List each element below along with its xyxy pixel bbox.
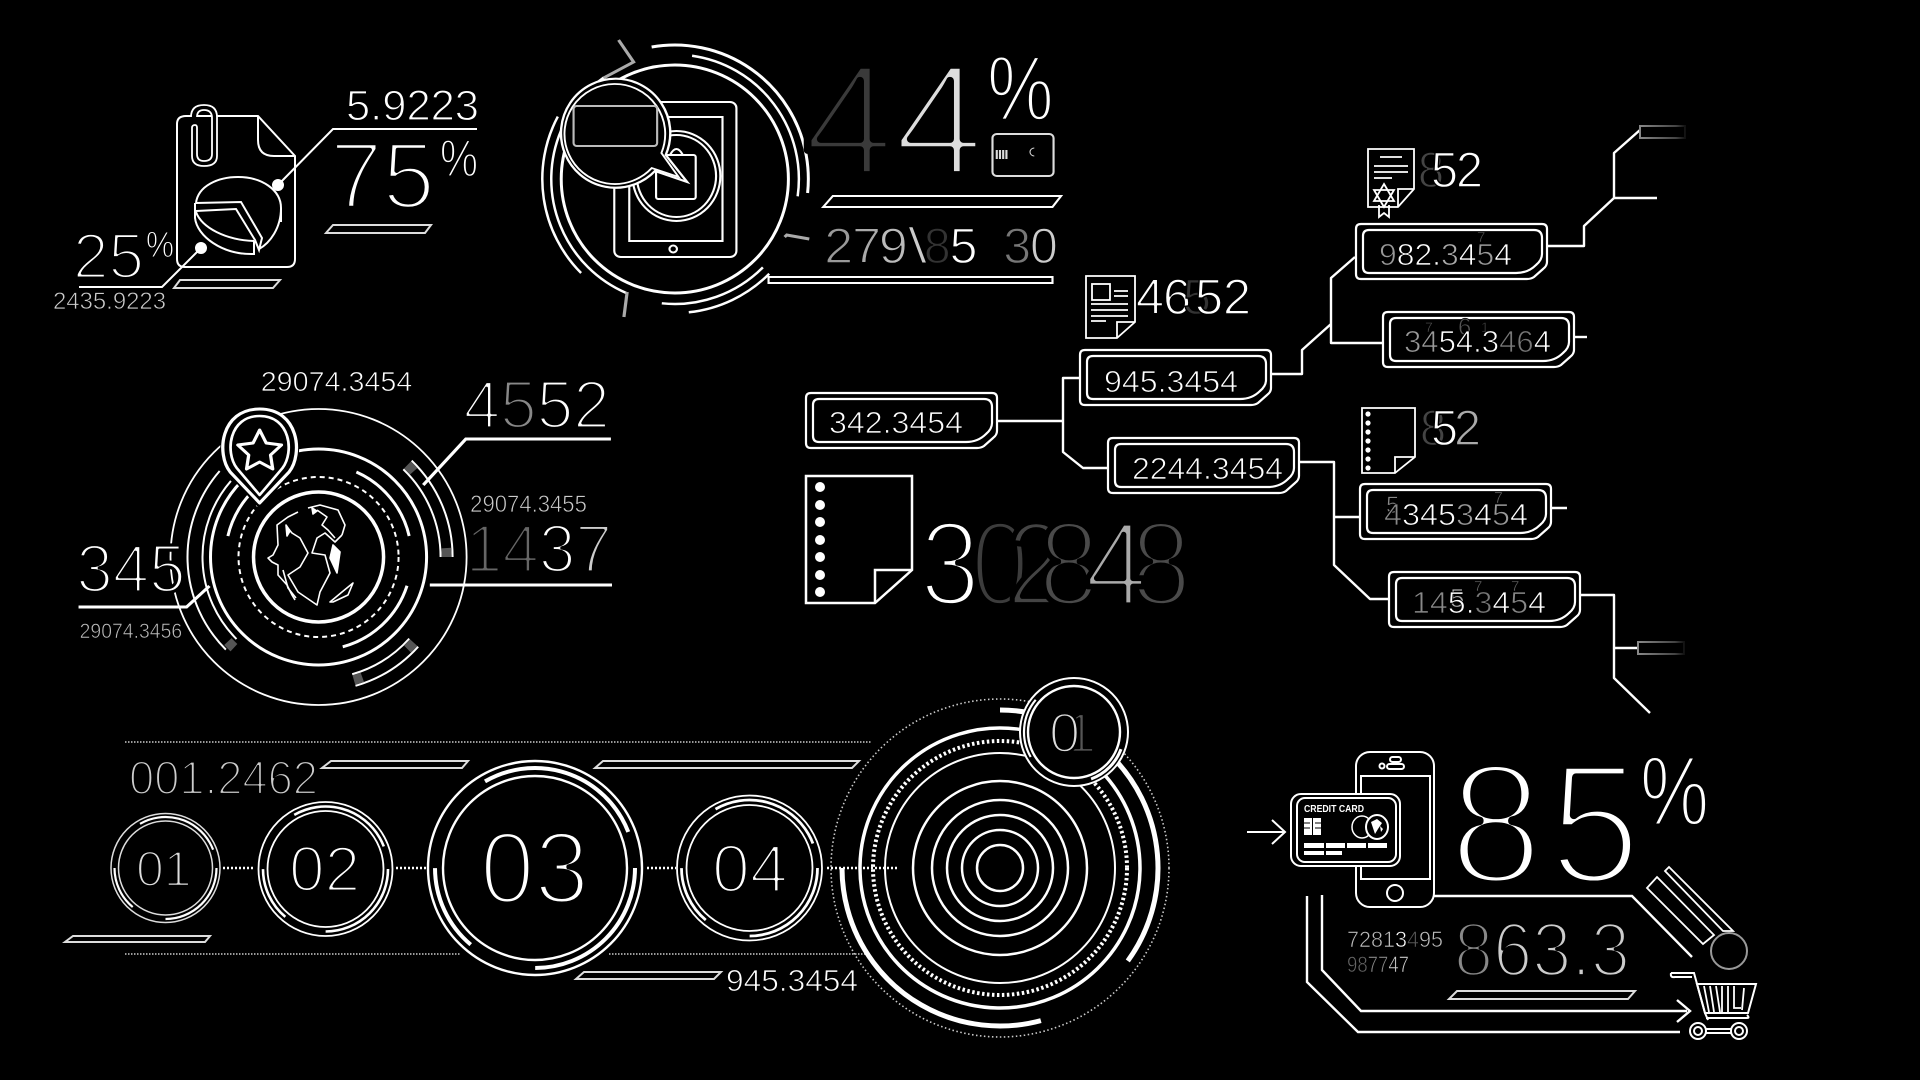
- label 945.3454: 945.3454: [726, 963, 858, 998]
- ghost digit: 7: [1477, 229, 1485, 246]
- icon: speech bubble: [561, 79, 687, 188]
- flickering value 30848: 2: [1007, 497, 1065, 631]
- flickering value 279\8530: 9: [879, 218, 908, 274]
- value 75: 75: [330, 123, 435, 229]
- flickering value 52: [1420, 400, 1481, 456]
- ghost digits: [1386, 490, 1503, 519]
- label 29074.3455: 29074.3455: [470, 491, 587, 518]
- node: 342.3454: [806, 393, 997, 448]
- node label: 945.3454: [1104, 364, 1238, 399]
- icon: credit card: CREDIT CARD: [1304, 803, 1364, 815]
- value 4652: 2: [1223, 269, 1251, 325]
- step 03: [394, 727, 676, 1009]
- connector lines: [997, 130, 1657, 713]
- label 29074.3454: 29074.3454: [261, 366, 412, 398]
- icon: shopping bag in circle: [632, 131, 720, 221]
- dim digit 4: 4: [804, 31, 894, 210]
- ghost digits: 7: [1494, 490, 1503, 507]
- leader line 1437: [430, 584, 612, 586]
- parallelogram bar: [174, 280, 280, 288]
- grey circle: [1711, 933, 1747, 969]
- flickering value 279\8530: 0: [1030, 218, 1058, 274]
- flickering value 279\8530: 5: [950, 218, 977, 274]
- badge 01: [1006, 664, 1142, 800]
- value 85: 8: [1449, 728, 1543, 920]
- percent sign: %: [1640, 736, 1709, 846]
- panel: globe rings: [76, 366, 612, 746]
- node: 945.3454: [1080, 350, 1271, 405]
- flickering value 52: 8: [1418, 142, 1444, 198]
- flickering value 279\8530: 3: [1003, 218, 1031, 274]
- step 03: 03: [480, 811, 589, 925]
- value 4652: 6: [1163, 269, 1191, 325]
- parallelogram bar: [326, 225, 431, 233]
- value 1437: 1437: [466, 512, 612, 587]
- node: 3454.3464: [1383, 312, 1574, 367]
- slanted bars: [1647, 867, 1733, 944]
- value 4552: 4552: [464, 368, 610, 443]
- flickering small values: [1347, 927, 1443, 977]
- arrow pointing to card: [1247, 820, 1285, 844]
- dotted rails: [125, 742, 872, 954]
- flickering value 30848: 8: [1131, 497, 1191, 631]
- value 85: [1449, 728, 1641, 920]
- node label: 43453454: [1384, 497, 1528, 532]
- step 01: [94, 796, 237, 940]
- radial rings: [129, 368, 508, 746]
- route arrows: [1307, 895, 1690, 1032]
- icon: shopping cart: [1671, 973, 1756, 1039]
- ghost digits: [1450, 578, 1519, 613]
- leader line to cart: [1434, 896, 1692, 957]
- step 04: 04: [712, 831, 788, 907]
- flickering value 52: 2: [1456, 142, 1483, 198]
- icon: document with paperclip and pie: [177, 105, 295, 267]
- panel: numbered timeline: [65, 645, 1223, 1080]
- panel: payment 85 percent: [1247, 728, 1756, 1039]
- ghost digits: 5: [1450, 583, 1464, 613]
- node label: 2244.3454: [1132, 451, 1283, 486]
- node: 145.3454: [1389, 572, 1580, 627]
- flickering value 52: 2: [1454, 400, 1481, 456]
- panel: tree diagram: [806, 126, 1685, 713]
- parallelogram bar: [823, 196, 1061, 207]
- rings, pin and labels: [76, 366, 612, 746]
- flickering value 52: 5: [1431, 400, 1458, 456]
- badge 01: 1: [1065, 701, 1096, 764]
- flickering value 279\8530: [824, 218, 1058, 274]
- step 01: 01: [136, 841, 192, 897]
- leader line 345: [79, 586, 209, 607]
- label 001.2462: 001.2462: [129, 751, 318, 804]
- icon: document with portrait: [1086, 276, 1135, 338]
- flickering value 30848: 8: [1039, 497, 1099, 631]
- flickering value 30848: [920, 497, 1191, 631]
- badge 01: 0: [1049, 701, 1080, 764]
- leader line 4552: [423, 439, 611, 485]
- icon: small note with dots: [1362, 408, 1415, 473]
- callout leader: 75 percent: [273, 129, 477, 190]
- value 4652: [1136, 269, 1251, 325]
- node label: 3454.3464: [1404, 324, 1551, 359]
- dotted connectors: [223, 867, 899, 869]
- flickering value 30848: 4: [1085, 497, 1147, 631]
- step 02: [237, 781, 414, 957]
- icon: globe: [268, 505, 353, 605]
- value 4652: 5: [1183, 269, 1211, 325]
- ghost digits: 7: [1474, 578, 1482, 595]
- parallelogram bar: [1449, 991, 1635, 999]
- flickering small values: 987747: [1347, 952, 1409, 977]
- label 2435.9223: 2435.9223: [53, 288, 166, 315]
- flickering value 279\8530: 8: [924, 218, 951, 274]
- value 863.3: 863.3: [1454, 908, 1630, 993]
- radial rings: [486, 0, 864, 369]
- flickering value 279\8530: \: [908, 218, 928, 274]
- value 4652: 4: [1136, 269, 1164, 325]
- digit 4: 4: [894, 31, 984, 210]
- node label: 342.3454: [829, 405, 963, 440]
- percent sign: %: [987, 38, 1054, 140]
- icon: smartphone: [1356, 752, 1434, 907]
- flickering value 30848: 0: [971, 497, 1029, 631]
- panel: tablet 44 percent: [486, 0, 1061, 369]
- node label: 982.3454: [1379, 237, 1512, 272]
- icon: tablet: [614, 102, 736, 257]
- ghost digits: 6: [1458, 314, 1471, 341]
- node: 43453454: [1360, 484, 1551, 539]
- value 85: 5: [1549, 728, 1641, 920]
- value 4652: 5: [1195, 269, 1223, 325]
- label 5.9223: 5.9223: [346, 82, 479, 130]
- ghost digits: 7: [1425, 319, 1433, 335]
- panel: document pie chart: [53, 82, 479, 315]
- step 02: 02: [289, 833, 360, 905]
- fading end tabs: [1638, 126, 1685, 654]
- label 29074.3456: 29074.3456: [80, 619, 182, 643]
- flickering value 52: [1418, 142, 1483, 198]
- flickering value 279\8530: 7: [852, 218, 881, 274]
- ghost digits: 7: [1511, 578, 1519, 595]
- ghost digits: [1425, 314, 1489, 341]
- percent sign: %: [440, 130, 478, 188]
- concentric target: [777, 645, 1223, 1080]
- tick marks: [604, 40, 809, 317]
- node: 2244.3454: [1108, 438, 1299, 493]
- node label: 145.3454: [1412, 585, 1546, 620]
- flickering value 52: 5: [1431, 142, 1458, 198]
- value 345: 345: [76, 532, 185, 607]
- double bar: [769, 277, 1052, 283]
- icon: credit card: [1291, 794, 1400, 866]
- value 25: 25: [73, 220, 144, 292]
- icon: large note with dots: [806, 476, 912, 603]
- flickering value 52: 8: [1420, 400, 1446, 456]
- parallelogram bars: [65, 761, 859, 979]
- icon: certificate with ribbon: [1368, 149, 1414, 217]
- flickering small values: 72813495: [1347, 927, 1443, 952]
- node: 982.3454: [1356, 224, 1547, 279]
- ghost digits: 1: [1481, 319, 1489, 335]
- flickering value 279\8530: 2: [824, 218, 853, 274]
- percent sign: %: [146, 224, 174, 265]
- ghost digits: 5: [1386, 492, 1399, 519]
- step 04: [654, 772, 845, 964]
- flickering value 30848: 3: [920, 497, 980, 631]
- icon: small card: [992, 134, 1054, 176]
- icon: star location pin: [220, 409, 299, 509]
- callout leader: 25 percent: [79, 243, 206, 287]
